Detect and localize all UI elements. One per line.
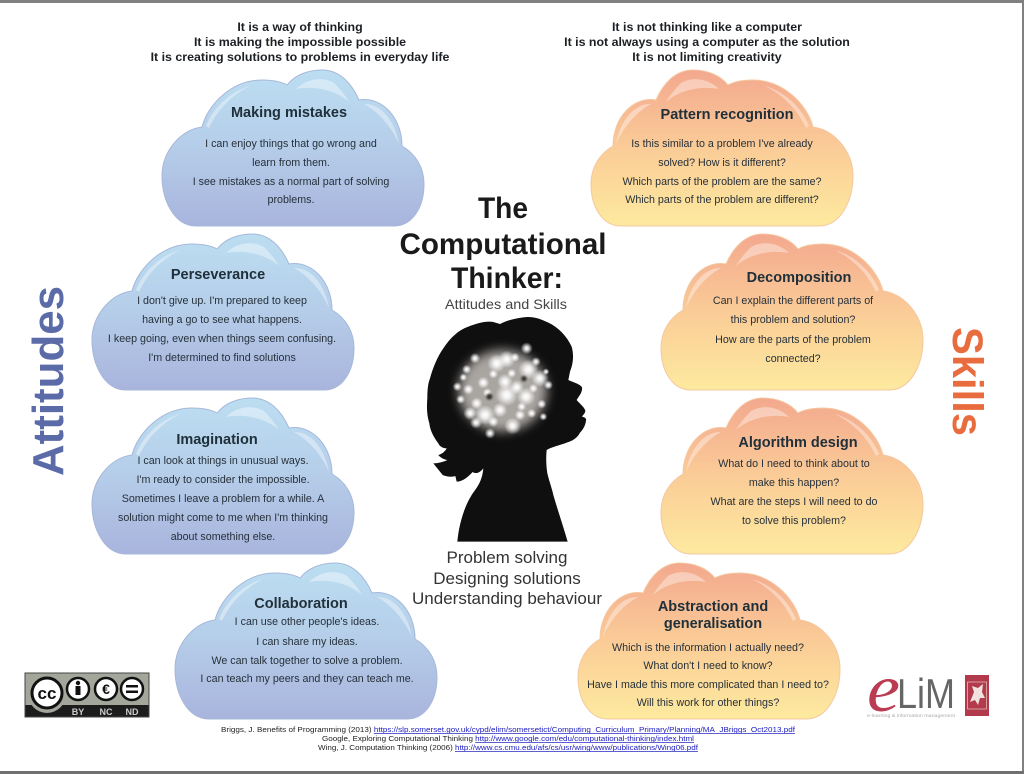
- panel: Making mistakes: I see mistakes as a normal part of solving: [193, 176, 389, 188]
- panel: Decomposition: How are the parts of the problem: [715, 334, 871, 346]
- text block: references: [221, 727, 795, 752]
- panel: Algorithm design: Algorithm design: [738, 435, 858, 451]
- title: [400, 192, 606, 295]
- panel: Pattern recognition: Is this similar to a problem I've already: [631, 138, 813, 150]
- subtitle: Attitudes and Skills: [445, 296, 567, 312]
- panel: Algorithm design: What are the steps I will need to do: [711, 496, 878, 508]
- panel: Perseverance: I don't give up. I'm prepared to keep: [137, 295, 307, 307]
- panel: Algorithm design: [661, 398, 923, 554]
- text block: what it is: It is creating solutions to problems in everyday life: [151, 50, 450, 64]
- icon: eLIM logo: e-learning & information management: [867, 713, 956, 718]
- panel: Imagination: solution might come to me when I'm thinking: [118, 512, 328, 524]
- panel: Making mistakes: Making mistakes: [231, 105, 347, 121]
- panel: Making mistakes: [162, 70, 424, 226]
- text block: key competences: Designing solutions: [433, 569, 581, 588]
- panel: Imagination: I'm ready to consider the impossible.: [136, 474, 310, 486]
- text block: what it is: It is a way of thinking: [237, 20, 363, 34]
- panel: Imagination: I can look at things in unusual ways.: [137, 455, 309, 467]
- icon: eLIM logo: LiM: [897, 670, 955, 717]
- icon: CC BY NC ND licence badge: [25, 673, 149, 717]
- panel: Imagination: about something else.: [171, 531, 275, 543]
- title: Thinker:: [451, 262, 563, 295]
- icon: eLIM logo: [867, 650, 956, 726]
- panel: Perseverance: Perseverance: [171, 267, 265, 283]
- text block: what it is not: It is not limiting creativity: [632, 50, 782, 64]
- text block: references: Google, Exploring Computational Thinking http://www.google.com/edu/computational-thinking/index.html: [322, 736, 695, 743]
- title: The: [478, 192, 528, 225]
- panel: Making mistakes: I can enjoy things that go wrong and: [205, 138, 377, 150]
- panel: Imagination: [92, 398, 354, 554]
- panel: Pattern recognition: Which parts of the problem are the same?: [622, 176, 822, 188]
- panel: Collaboration: We can talk together to solve a problem.: [211, 655, 403, 667]
- panel: Pattern recognition: Pattern recognition: [661, 107, 793, 123]
- icon: eLIM logo: e: [867, 650, 900, 726]
- text block: what it is not: [564, 20, 850, 64]
- text block: what it is not: It is not always using a computer as the solution: [564, 35, 850, 49]
- panel: Decomposition: this problem and solution?: [731, 314, 855, 326]
- icon: CC BY NC ND licence badge: ND: [126, 707, 139, 717]
- icon: CC BY NC ND licence badge: NC: [100, 707, 113, 717]
- panel: Perseverance: I keep going, even when things seem confusing.: [108, 333, 336, 345]
- panel: Perseverance: [92, 234, 354, 390]
- panel: Pattern recognition: Which parts of the problem are different?: [625, 194, 819, 206]
- text block: key competences: Problem solving: [447, 548, 567, 567]
- panel: Decomposition: Decomposition: [747, 270, 851, 286]
- title: Computational: [400, 228, 606, 261]
- panel: Perseverance: having a go to see what happens.: [142, 314, 302, 326]
- heading: Attitudes: Attitudes: [24, 286, 73, 476]
- text block: what it is: [151, 20, 450, 64]
- panel: Algorithm design: to solve this problem?: [742, 515, 846, 527]
- panel: Collaboration: I can teach my peers and they can teach me.: [200, 673, 414, 685]
- icon: CC BY NC ND licence badge: cc: [38, 684, 56, 703]
- panel: Decomposition: Can I explain the different parts of: [713, 295, 873, 307]
- panel: Imagination: Sometimes I leave a problem for a while. A: [122, 493, 325, 505]
- panel: Decomposition: [661, 234, 923, 390]
- text block: key competences: Understanding behaviour: [412, 589, 602, 608]
- panel: Abstraction and generalisation: generalisation: [664, 616, 762, 632]
- panel: Collaboration: I can share my ideas.: [256, 636, 358, 648]
- icon: CC BY NC ND licence badge: €: [102, 681, 110, 697]
- panel: Algorithm design: What do I need to think about to: [718, 458, 870, 470]
- panel: Imagination: Imagination: [176, 432, 258, 448]
- panel: Making mistakes: problems.: [268, 194, 314, 206]
- panel: Collaboration: Collaboration: [254, 596, 348, 612]
- icon: CC BY NC ND licence badge: BY: [72, 707, 84, 717]
- text block: references: Wing, J. Computation Thinking (2006) http://www.cs.cmu.edu/afs/cs/usr/wing/www/publications/Wing06.pdf: [318, 745, 698, 752]
- icon: crest: [965, 675, 989, 716]
- panel: Decomposition: connected?: [765, 353, 821, 365]
- panel: Collaboration: I can use other people's ideas.: [235, 616, 379, 628]
- panel: Abstraction and generalisation: [578, 563, 840, 719]
- panel: Pattern recognition: solved? How is it different?: [658, 157, 786, 169]
- panel: Abstraction and generalisation: What don't I need to know?: [643, 660, 773, 672]
- panel: Abstraction and generalisation: Abstraction and: [658, 599, 768, 615]
- panel: Pattern recognition: [591, 70, 853, 226]
- heading: Skills: Skills: [943, 327, 991, 436]
- panel: Abstraction and generalisation: Have I made this more complicated than I need to?: [587, 679, 829, 691]
- text block: key competences: [412, 548, 602, 608]
- panel: Perseverance: I'm determined to find solutions: [148, 352, 296, 364]
- panel: Abstraction and generalisation: Which is the information I actually need?: [612, 642, 804, 654]
- text block: what it is not: It is not thinking like a computer: [612, 20, 802, 34]
- panel: Making mistakes: learn from them.: [252, 157, 330, 169]
- panel: Abstraction and generalisation: Will this work for other things?: [637, 697, 779, 709]
- panel: Collaboration: [175, 563, 437, 719]
- text block: what it is: It is making the impossible possible: [194, 35, 406, 49]
- text block: references: Briggs, J. Benefits of Programming (2013) https://slp.somerset.gov.uk/cypd/elim/somersetict/Computing_Curriculum_Primary/Planning/MA_JBriggs_Oct2013.pdf: [221, 727, 795, 734]
- panel: Algorithm design: make this happen?: [749, 477, 839, 489]
- icon: child silhouette with glowing brain: [427, 317, 586, 542]
